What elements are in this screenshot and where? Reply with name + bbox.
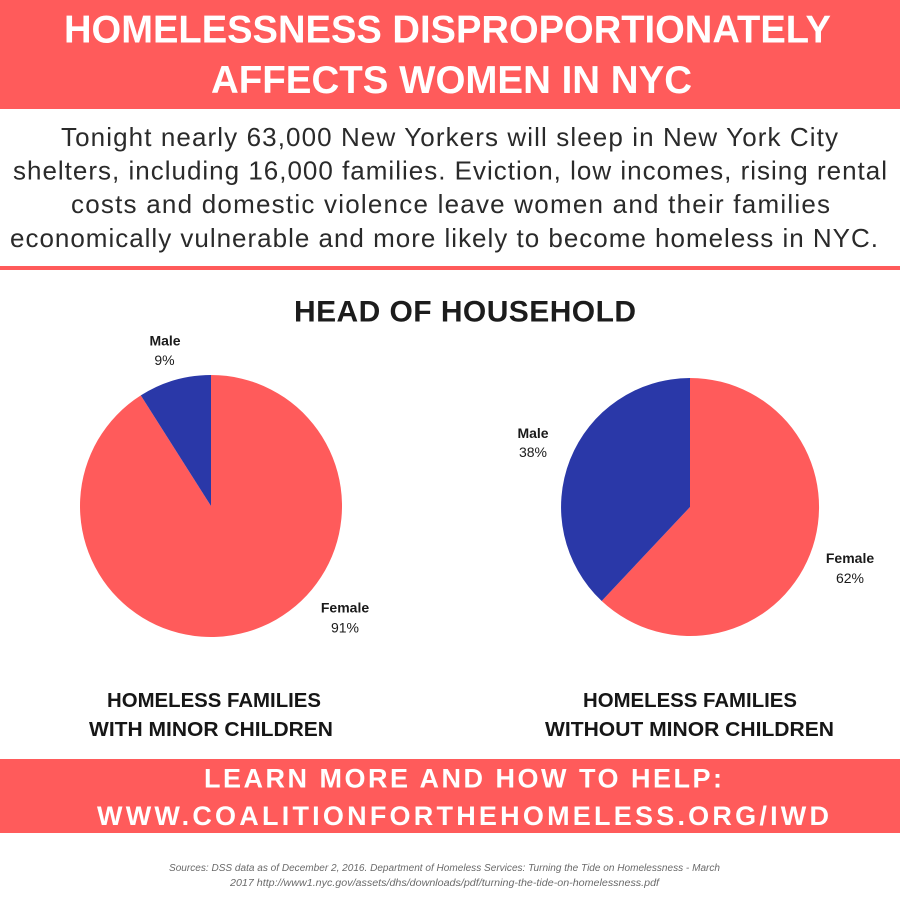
label: male 38%: Male: [517, 425, 549, 441]
label: male 9%: Male: [149, 332, 181, 348]
label: female 62%: Female: [826, 550, 874, 566]
sources note: 2017 http://www1.nyc.gov/assets/dhs/downloads/pdf/turning-the-tide-on-homelessness.pdf: [229, 878, 660, 889]
label: female 62%: [826, 550, 874, 586]
intro paragraph: costs and domestic violence leave women and their families: [71, 189, 830, 219]
title text: [64, 8, 831, 102]
call to action text: LEARN MORE AND HOW TO HELP:: [204, 764, 722, 794]
call to action text: [97, 764, 829, 831]
pie chart: families with minor children: [80, 332, 369, 637]
caption: with minor children: HOMELESS FAMILIES: [107, 689, 321, 712]
label: female 91%: Female: [321, 600, 369, 616]
title text: HOMELESSNESS DISPROPORTIONATELY: [64, 8, 831, 52]
pie chart: families without minor children: [517, 378, 874, 636]
caption: with minor children: [89, 689, 333, 741]
intro paragraph: economically vulnerable and more likely to become homeless in NYC.: [10, 223, 878, 253]
slice: male 9%: [141, 375, 211, 506]
label: male 9%: [149, 332, 181, 368]
label: female 91%: 91%: [331, 620, 359, 636]
label: male 38%: [517, 425, 549, 460]
caption: without minor children: WITHOUT MINOR CHILDREN: [545, 718, 834, 741]
slice: male 38%: [561, 378, 690, 601]
label: female 62%: 62%: [836, 570, 864, 586]
slice: female 62%: [602, 378, 819, 636]
caption: with minor children: WITH MINOR CHILDREN: [89, 718, 333, 741]
call to action text: WWW.COALITIONFORTHEHOMELESS.ORG/IWD: [97, 801, 829, 831]
chart section heading: HEAD OF HOUSEHOLD: [294, 296, 636, 328]
sources note: [169, 863, 720, 889]
sources note: Sources: DSS data as of December 2, 2016. Department of Homeless Services: Turning the Tide on Homelessness - March: [169, 863, 720, 874]
caption: without minor children: HOMELESS FAMILIES: [583, 689, 797, 712]
call to action banner: [0, 759, 900, 833]
title text: AFFECTS WOMEN IN NYC: [211, 59, 692, 102]
intro paragraph: shelters, including 16,000 families. Eviction, low incomes, rising rental: [13, 156, 887, 186]
label: female 91%: [321, 600, 369, 636]
title banner: [0, 0, 900, 109]
intro paragraph: [10, 122, 887, 253]
label: male 9%: 9%: [154, 352, 175, 368]
intro paragraph: Tonight nearly 63,000 New Yorkers will sleep in New York City: [61, 122, 838, 152]
slice: female 91%: [80, 375, 342, 637]
divider rule: [0, 266, 900, 270]
caption: without minor children: [545, 689, 834, 741]
label: male 38%: 38%: [519, 444, 547, 460]
